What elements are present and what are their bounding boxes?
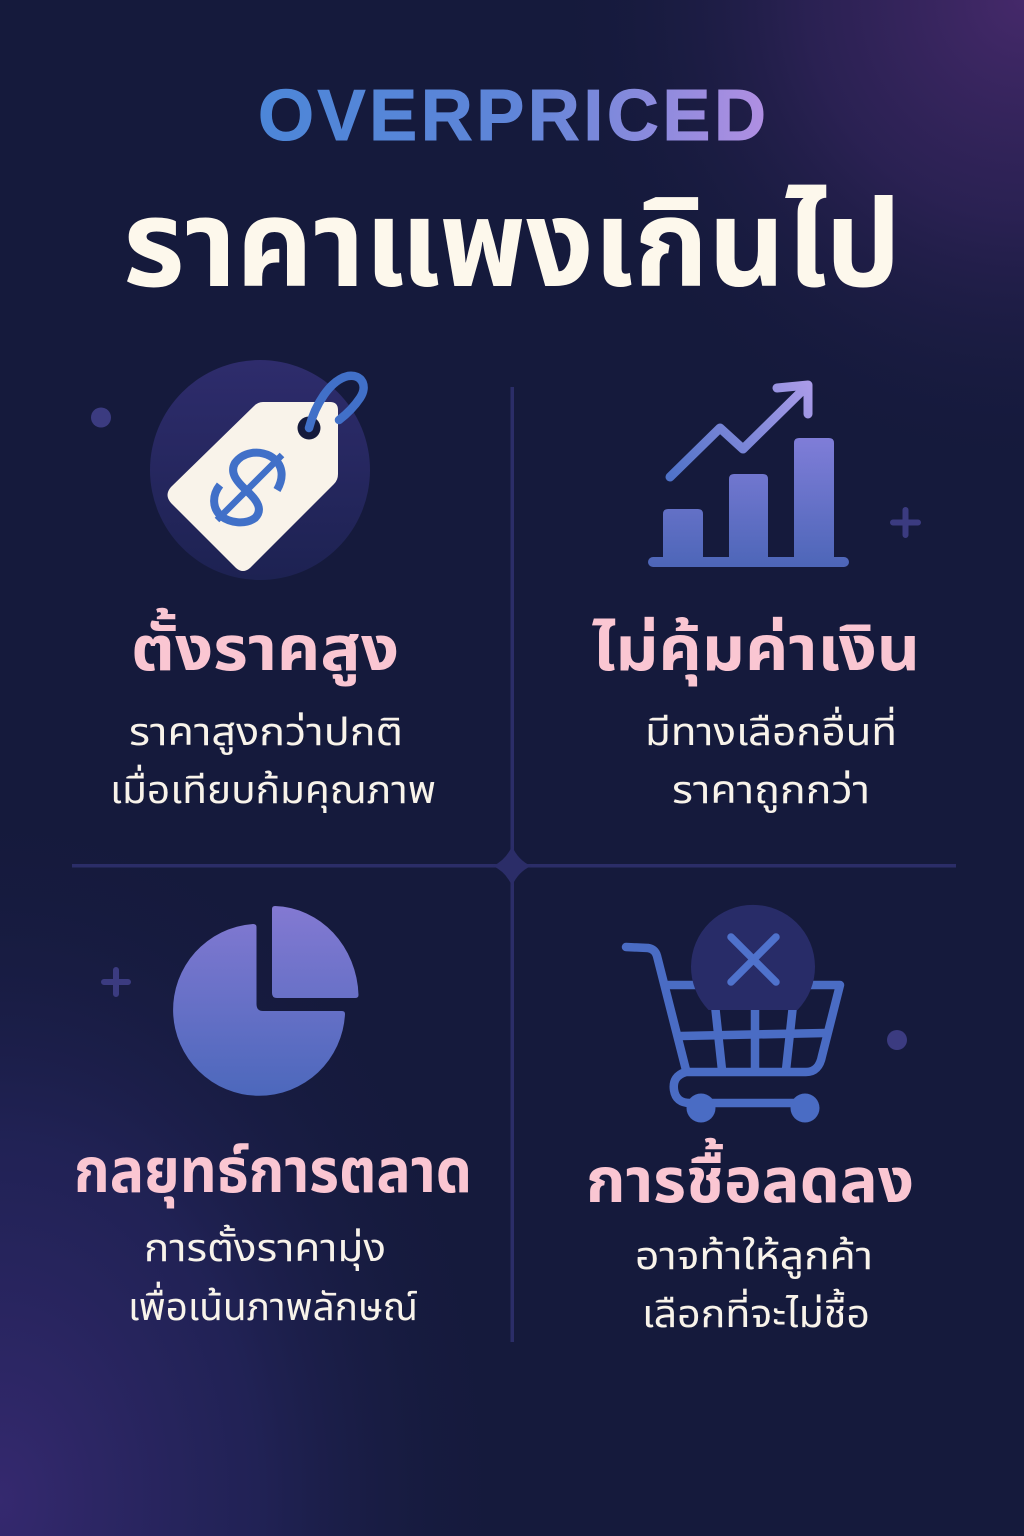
decorative plus [893, 510, 918, 535]
decorative dot [887, 1030, 907, 1050]
decorative dot [91, 408, 111, 428]
heading: marketing strategy: กลยุทธ์การตลาด [74, 1137, 472, 1208]
body: fewer purchases: อาจท้าให้ลูกค้า [635, 1236, 873, 1279]
decorative plus [104, 970, 128, 994]
icon: price tag [150, 360, 370, 580]
heading: set high price: ตั้งราคสูง [131, 607, 399, 687]
icon: rising bar chart [648, 385, 849, 567]
body: set high price [110, 712, 436, 813]
body: fewer purchases [635, 1236, 873, 1336]
grid dividers [72, 387, 956, 1342]
panel: poor value [592, 385, 920, 813]
panel: high price [91, 360, 436, 813]
body: set high price: ราคาสูงกว่าปกติ [129, 712, 403, 755]
body: marketing strategy [128, 1224, 418, 1329]
body: set high price: เมื่อเทียบก้มคุณภาพ [110, 764, 436, 813]
body: fewer purchases: เลือกที่จะไม่ชื้อ [642, 1288, 870, 1336]
icon: pie chart [173, 906, 358, 1096]
panel: fewer purchases [586, 905, 914, 1336]
icon: shopping cart with cross [626, 905, 840, 1122]
body: poor value: ราคาถูกกว่า [672, 770, 870, 813]
body: marketing strategy: เพื่อเน้นภาพลักษณ์ [128, 1281, 418, 1329]
body: poor value: มีทางเลือกอื่นที่ [645, 706, 897, 754]
heading: poor value: ไม่คุ้มค่าเงิน [592, 615, 920, 686]
body: marketing strategy: การตั้งราคามุ่ง [144, 1224, 386, 1271]
title: Thai heading: ราคาแพงเกินไป [123, 176, 901, 312]
body: poor value [645, 706, 897, 813]
heading: fewer purchases: การชื้อลดลง [586, 1137, 914, 1216]
title: OVERPRICED: OVERPRICED [258, 76, 766, 156]
panel: marketing strategy [74, 906, 472, 1329]
